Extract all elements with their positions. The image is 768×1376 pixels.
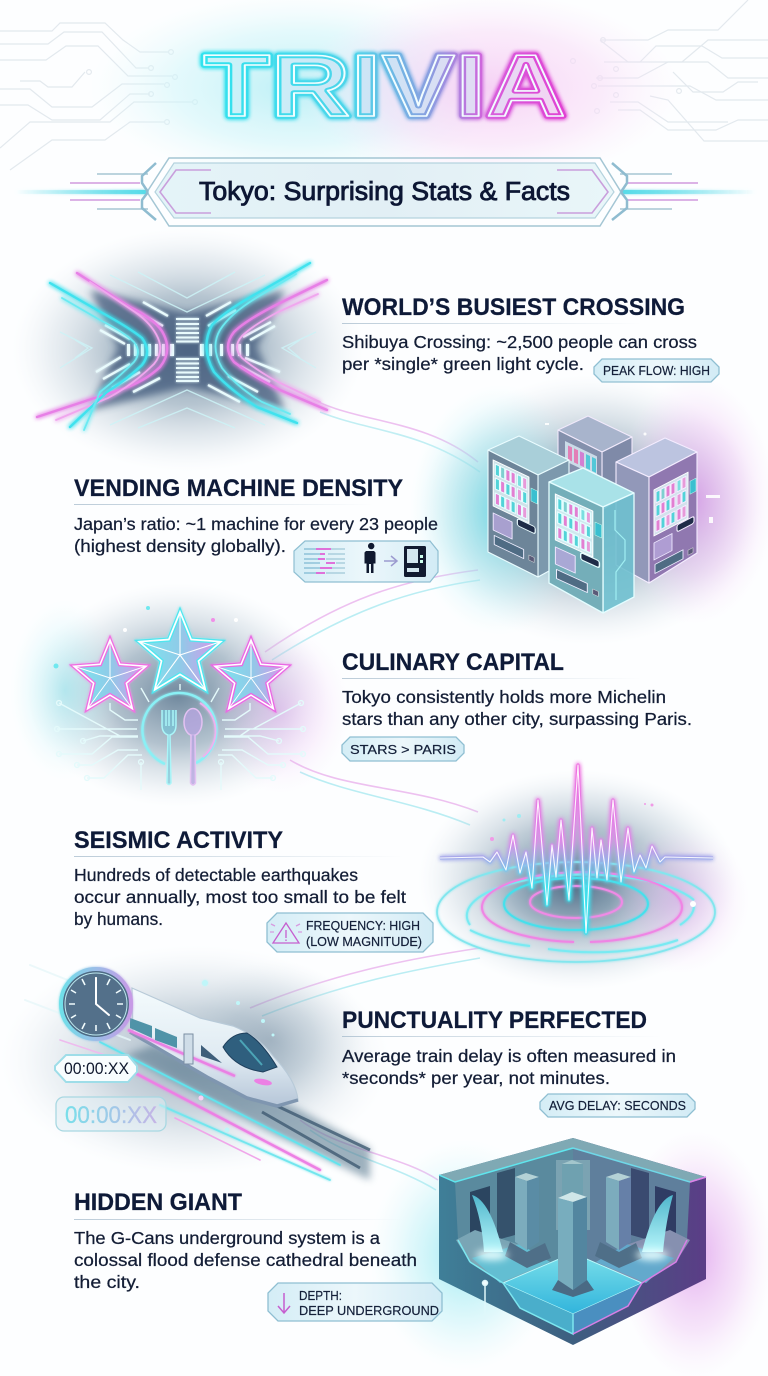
crosswalks [96,302,280,402]
body: crossing: Shibuya Crossing: ~2,500 people can cross [342,332,697,352]
sparkles [54,606,238,668]
outer block [439,1138,706,1345]
body: hidden giant: The G-Cans underground system is a [74,1228,380,1248]
sparkles [490,803,696,907]
neon curved paths left [37,273,167,430]
badge: depth: DEEP UNDERGROUND [299,1304,439,1318]
waterfalls [472,1195,503,1252]
machine: left [488,436,569,577]
body: hidden giant: colossal flood defense cathedral beneath [74,1250,417,1270]
pillar left [505,1173,551,1268]
body: punctuality: Average train delay is often measured in [342,1046,676,1066]
body: culinary: Tokyo consistently holds more Michelin [342,687,666,707]
machine icon [404,546,426,577]
badge: peak flow [594,359,719,382]
heading: culinary capital: CULINARY CAPITAL [342,649,564,676]
pillar centre [552,1192,594,1297]
body: hidden giant: the city. [74,1272,140,1292]
illustration: bullet train with clock [0,945,390,1180]
badge: stars > paris [342,737,464,761]
subtitle text: Tokyo: Surprising Stats & Facts [199,178,570,206]
badge: frequency [267,913,433,952]
list of data rows [304,549,345,573]
badge: avg delay: AVG DELAY: SECONDS [549,1099,686,1113]
tracks [125,1045,370,1180]
body: vending: Japan’s ratio: ~1 machine for every 23 people [74,514,438,534]
ripple rings [437,862,715,962]
train body [128,988,298,1106]
train pink stripe [128,1030,235,1076]
callout leader line [440,1280,488,1319]
body: hidden giant [74,1228,417,1292]
illustration: michelin stars and cutlery [10,583,350,807]
chevrons [60,272,316,428]
star right [215,640,287,709]
road X shape [90,290,285,410]
badge: avg delay [540,1094,695,1117]
body: seismic: by humans. [74,909,163,929]
edges [439,1148,706,1334]
body: seismic: occur annually, most too small to be felt [74,887,406,907]
heading: world's busiest crossing: WORLD’S BUSIEST CROSSING [342,294,685,321]
inner walls [455,1148,573,1283]
body: culinary: stars than any other city, surpassing Paris. [342,709,692,729]
connector lines between sections [250,392,480,1190]
machine: back [558,416,632,510]
illustration: seismic wave [418,765,750,990]
illustration: shibuya crossing [12,228,364,472]
title glow [90,0,680,183]
body: vending [74,514,438,556]
clock [61,969,131,1039]
circuit decoration right [571,0,768,141]
badge: depth: DEPTH: [299,1289,342,1303]
machine: right [616,438,697,583]
waveform [440,765,713,933]
title: TRIVIA: TRIVIA [203,36,566,135]
heading: seismic activity: SEISMIC ACTIVITY [74,827,283,854]
headlight [254,1077,272,1087]
sparkles [198,980,274,1132]
badge: stars > paris: STARS > PARIS [350,743,456,757]
heading: vending machine density: VENDING MACHINE DENSITY [74,475,403,502]
arrow [384,556,397,566]
body: crossing [342,332,697,374]
badge: frequency: FREQUENCY: HIGH [306,919,420,933]
person icon [364,543,376,573]
illustration: underground flood system [370,1130,768,1376]
heading: punctuality perfected: PUNCTUALITY PERFECTED [342,1007,647,1034]
circuit traces [55,684,305,790]
body: vending: (highest density globally). [74,536,286,556]
fork [162,710,176,784]
illustration: vending machines [410,375,768,645]
digital pill: 00:00:XX [64,1060,129,1078]
windshield [223,1033,277,1072]
machine: front [549,468,634,613]
body: punctuality [342,1046,676,1088]
body: punctuality: *seconds* per year, not minutes. [342,1068,610,1088]
circuit decoration left [0,23,197,170]
pillar right [595,1173,642,1268]
train side windows [130,1018,222,1064]
digital readout: 00:00:XX [65,1102,157,1129]
arrow down icon [278,1293,290,1313]
neon curved paths right [206,263,327,423]
sparkles [545,423,720,523]
digital pill [55,1055,137,1082]
plate [142,693,216,764]
badge: depth [268,1283,442,1321]
spoon [184,708,202,785]
subtitle banner [15,158,756,226]
badge: machine ratio pictogram [294,541,438,582]
splash glow [476,1250,668,1260]
rails and light streaks [25,965,340,1180]
pillar back [562,1160,583,1198]
side platforms [456,1230,550,1283]
badge: frequency: (LOW MAGNITUDE) [306,935,422,949]
heading: hidden giant: HIDDEN GIANT [74,1189,242,1216]
warning icon [270,923,302,943]
star left [74,640,146,709]
body: seismic [74,865,406,929]
top rim [439,1138,706,1182]
star middle [139,612,221,690]
badge: peak flow: PEAK FLOW: HIGH [603,364,710,378]
water floor [503,1253,642,1314]
body: culinary [342,687,692,729]
body: seismic: Hundreds of detectable earthquakes [74,865,358,885]
body: crossing: per *single* green light cycle. [342,354,584,374]
title: TRIVIA: TRIVIA [203,36,566,135]
